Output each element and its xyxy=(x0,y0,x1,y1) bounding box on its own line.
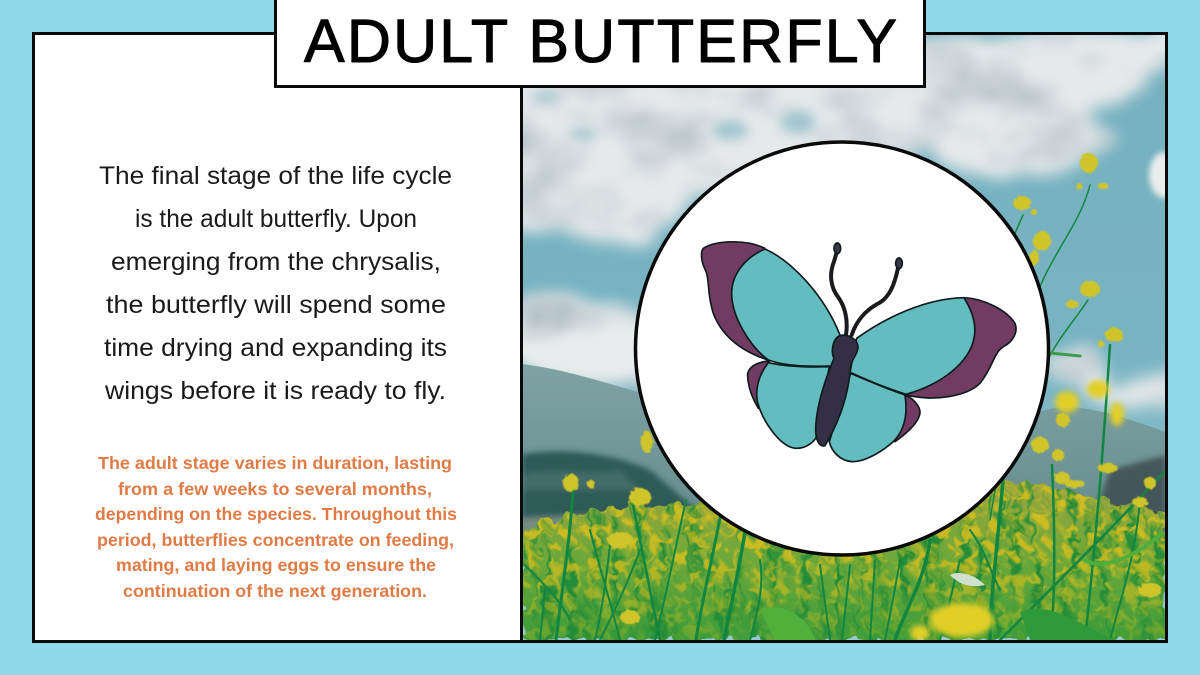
right upper wing xyxy=(850,298,975,394)
left upper wing xyxy=(732,249,840,366)
left upper wing edge xyxy=(701,242,770,361)
flower field xyxy=(522,470,1166,640)
title: ADULT BUTTERFLY xyxy=(304,7,897,75)
right lower wing edge xyxy=(895,396,920,442)
mountains xyxy=(522,364,1166,560)
blue sky gaps in the clouds xyxy=(531,91,816,140)
icon: butterfly xyxy=(701,242,1016,462)
orange detail text xyxy=(95,453,457,601)
left lower wing edge xyxy=(748,361,769,408)
clouds xyxy=(490,20,1190,415)
right upper wing edge xyxy=(906,298,1016,398)
main description text: wings before it is ready to fly. xyxy=(104,377,446,405)
photo frame xyxy=(522,34,1166,642)
antennae xyxy=(831,250,899,335)
antenna tips xyxy=(834,243,902,269)
main description text: the butterfly will spend some xyxy=(106,291,446,319)
dark forest xyxy=(522,451,1166,535)
main description text: time drying and expanding its xyxy=(104,334,447,362)
flower clusters xyxy=(563,153,1162,624)
body xyxy=(816,335,858,446)
panel: text xyxy=(34,34,522,642)
panel: meadow photo xyxy=(523,35,1165,640)
orange detail text: continuation of the next generation. xyxy=(123,581,427,601)
main description text xyxy=(99,162,452,405)
left lower wing xyxy=(757,363,829,448)
main description text: is the adult butterfly. Upon xyxy=(135,205,417,233)
white circle xyxy=(636,142,1048,555)
orange detail text: The adult stage varies in duration, lasting xyxy=(98,453,452,473)
orange detail text: mating, and laying eggs to ensure the xyxy=(116,555,436,575)
main description text: The final stage of the life cycle xyxy=(99,162,452,190)
stems xyxy=(525,185,1166,640)
orange detail text: depending on the species. Throughout this xyxy=(95,504,457,524)
orange detail text: period, butterflies concentrate on feeding, xyxy=(97,530,454,550)
blurred foreground blossoms xyxy=(910,380,1124,641)
right lower wing xyxy=(829,373,906,462)
main description text: emerging from the chrysalis, xyxy=(111,248,441,276)
bright leaves xyxy=(760,573,1115,640)
title banner xyxy=(276,0,924,86)
orange detail text: from a few weeks to several months, xyxy=(118,479,432,499)
